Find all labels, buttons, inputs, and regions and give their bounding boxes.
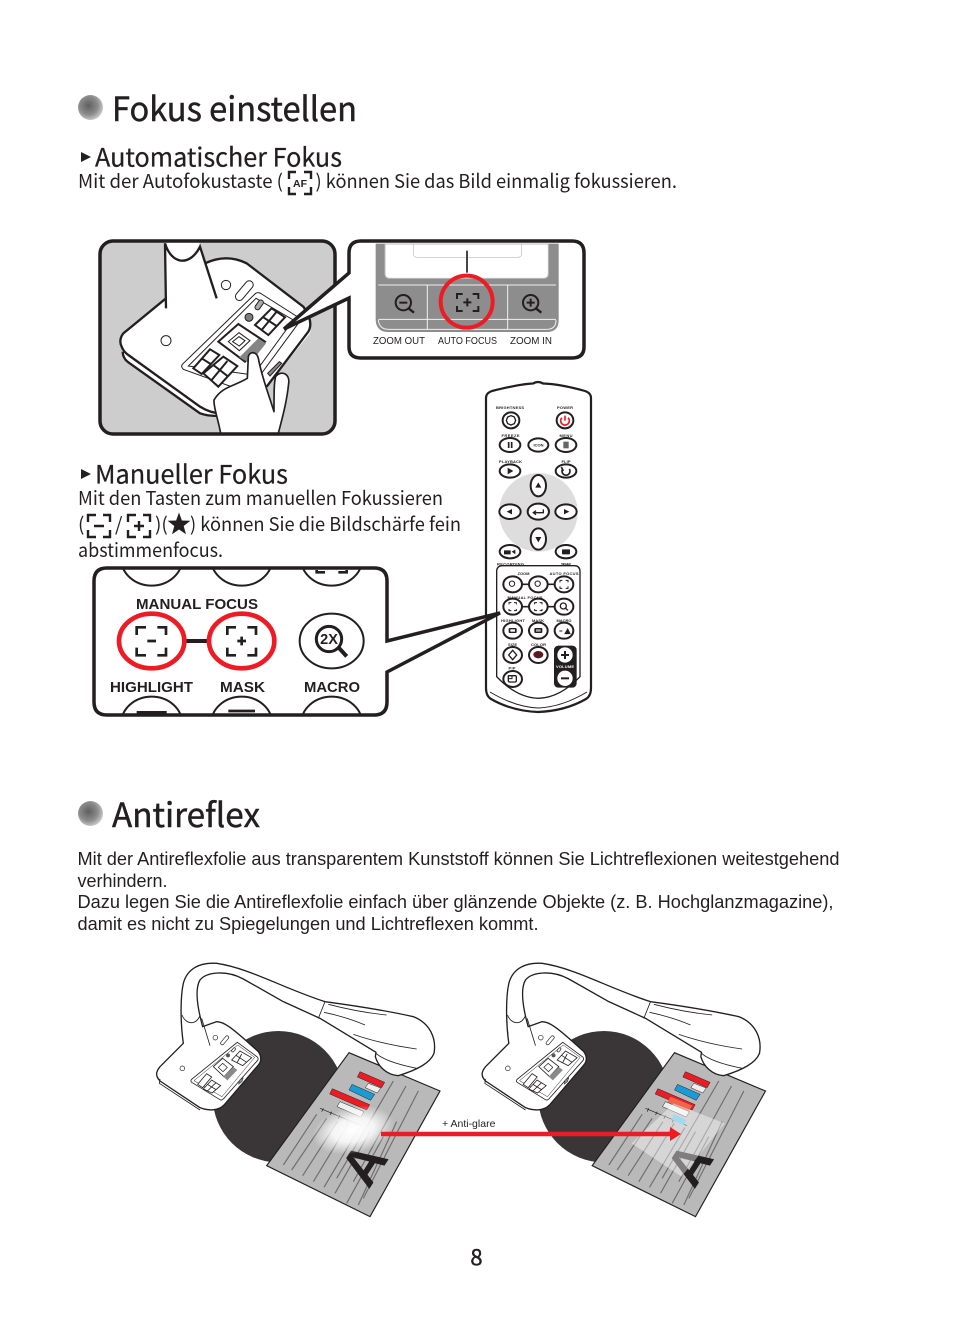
remote button labels: VOLUME [556,664,574,669]
text: autofocus description: Mit der Autofokustaste ( [78,167,283,194]
remote button labels: COLOR [531,642,546,647]
remote button labels: MENU [560,433,573,438]
page number: 8 [470,1240,483,1272]
text: manual focus description [78,484,461,563]
text: manual focus description: ( [78,510,84,537]
remote button labels: FLIP [562,459,571,464]
remote button labels: POWER [557,405,573,410]
icon: auto focus [457,294,478,311]
panel: control panel callout with auto focus button: ZOOM IN [510,335,552,347]
button: focus minus [119,614,184,668]
icon: zoom in [523,295,541,313]
text: manual focus description: Mit den Tasten zum manuellen Fokussieren [78,484,443,511]
illustration: camera with anti-glare sheet [482,963,765,1217]
remote button labels: PLAYBACK [499,459,522,464]
panel: control panel callout with auto focus button: AUTO FOCUS [438,335,497,347]
panel: manual focus callout: MASK [220,679,265,696]
text: antiglare paragraph [78,849,840,934]
red highlight circle [441,276,493,328]
panel: control panel callout with auto focus button: ZOOM OUT [373,335,426,347]
connector [185,635,208,647]
arrow: anti-glare [381,1118,681,1141]
remote button labels [496,405,579,670]
heading: Antireflex: Antireflex [112,788,260,837]
arrow: anti-glare: + Anti-glare [442,1118,496,1130]
icon: star [168,512,190,534]
remote button labels: MACRO [556,618,572,623]
icon: AF button: AF [293,178,308,190]
panel: manual focus callout: MACRO [304,679,360,696]
text: manual focus description: ) können Sie die Bildschärfe fein [190,510,461,537]
anti-glare sheet [631,1103,725,1177]
text: antiglare paragraph: damit es nicht zu Spiegelungen und Lichtreflexen kommt. [78,914,538,934]
icon: focus minus [88,515,110,537]
remote button labels: FREEZE [502,433,520,438]
subheading: Manueller Fokus: Manueller Fokus [95,454,288,492]
panel: manual focus callout: HIGHLIGHT [110,679,193,696]
remote button labels: AUTO FOCUS [550,571,579,576]
remote button labels: SIZE [508,642,517,647]
icon: hand [214,353,289,433]
remote button labels: MASK [532,618,544,623]
icon: focus plus [128,515,150,537]
remote control [486,382,591,712]
button: macro [300,614,364,668]
panel: manual focus callout: 2X [320,632,338,648]
text: antiglare paragraph: verhindern. [78,871,168,891]
illustration: camera with glare [157,963,440,1217]
icon: section bullet [78,801,103,826]
remote button labels: BRIGHTNESS [496,405,524,410]
icon: section bullet [78,95,103,120]
remote button labels: ICON [534,442,544,448]
panel: control panel callout with auto focus button [284,241,584,358]
text: antiglare paragraph: Mit der Antireflexfolie aus transparentem Kunststoff können Sie Lichtreflexionen weitestgehend [78,849,840,869]
panel: manual focus callout [92,566,501,717]
panel: hand pressing button on camera base [100,240,335,434]
remote button labels: ZOOM [518,571,530,576]
icon: AF button [289,172,311,194]
remote button labels: RECORDING [497,562,524,566]
icon: zoom out [396,295,414,313]
text: autofocus description: ) können Sie das Bild einmalig fokussieren. [316,167,677,194]
text: autofocus description [78,167,677,194]
text: antiglare paragraph: Dazu legen Sie die Antireflexfolie einfach über glänzende Objekte (z. B. Hochglanzmagazine), [78,892,834,912]
button: focus plus [209,614,274,668]
heading: Fokus einstellen: Fokus einstellen [112,82,357,131]
panel: manual focus callout: MANUAL FOCUS [136,596,258,613]
text: manual focus description: / [115,510,123,537]
text: manual focus description: abstimmenfocus. [78,536,223,563]
glare [308,1099,399,1161]
remote button labels: SNAP [561,562,571,566]
text: manual focus description: )( [155,510,168,537]
remote button labels: MANUAL FOCUS [508,595,543,600]
subheading: Automatischer Fokus: Automatischer Fokus [95,138,342,174]
remote button labels: HIGHLIGHT [501,618,526,623]
remote button labels: PIP [508,666,516,670]
